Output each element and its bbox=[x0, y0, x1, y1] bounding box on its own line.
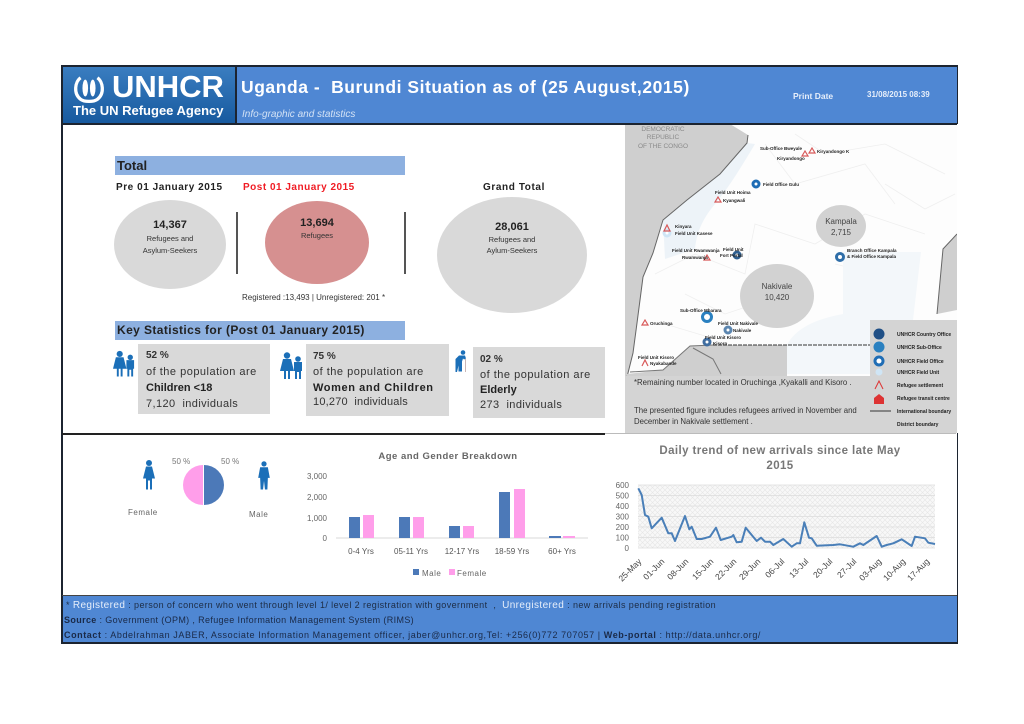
line chart date labels: 13-Jul bbox=[787, 556, 810, 580]
map: place labels: Field Office Gulu bbox=[763, 182, 799, 187]
line chart date labels: 27-Jul bbox=[835, 556, 858, 580]
divider left bbox=[236, 212, 238, 274]
male label: Male bbox=[249, 510, 268, 519]
line chart date labels: 08-Jun bbox=[665, 556, 691, 582]
bar chart title: Age and Gender Breakdown bbox=[378, 451, 518, 462]
map: place labels bbox=[638, 146, 897, 366]
header title: Uganda - Burundi Situation as of (25 August,2015) bbox=[241, 77, 690, 97]
line chart plot area bbox=[638, 485, 935, 548]
icon: male bbox=[258, 461, 270, 490]
map note: included figure: December in Nakivale settlement . bbox=[634, 416, 753, 426]
map note: remaining number: *Remaining number located in Oruchinga ,Kyakalli and Kisoro . bbox=[634, 378, 852, 387]
map: place labels: Kyangwali bbox=[723, 198, 745, 203]
gender labels bbox=[172, 457, 239, 466]
header subtitle: Info-graphic and statistics bbox=[242, 109, 355, 120]
line chart date labels bbox=[616, 556, 932, 583]
line chart title: 2015 bbox=[766, 460, 794, 472]
bar chart y axis: 1,000 bbox=[307, 514, 328, 523]
line chart y axis bbox=[616, 481, 630, 553]
logo panel bbox=[63, 67, 235, 123]
map: Kampala label: 2,715 bbox=[831, 228, 852, 237]
stat card: women and children: 10,270 individuals bbox=[313, 396, 408, 408]
total heading bar bbox=[115, 156, 405, 175]
stat card: women and children bbox=[306, 344, 449, 416]
line chart: daily trend bbox=[616, 445, 936, 583]
stat card: children: 7,120 individuals bbox=[146, 398, 238, 410]
grand total heading: Grand Total bbox=[483, 182, 545, 193]
total heading bar: Total bbox=[117, 158, 147, 173]
map: place labels: Field Unit bbox=[723, 247, 744, 252]
header band bbox=[62, 66, 957, 124]
map: DRC territory bbox=[625, 124, 748, 377]
footer source line: Source : Government (OPM) , Refugee Information Management System (RIMS) bbox=[64, 615, 414, 625]
icon: women and children 2 bbox=[280, 352, 302, 379]
grand total bubble: 28,061 bbox=[495, 221, 529, 233]
line chart date labels: 10-Aug bbox=[881, 556, 908, 583]
map: lake victoria bbox=[787, 252, 921, 374]
line chart date labels: 01-Jun bbox=[641, 556, 667, 582]
stat card: elderly: 273 individuals bbox=[480, 399, 562, 411]
bar chart x axis: 05-11 Yrs bbox=[394, 547, 428, 556]
map: Nakivale label bbox=[762, 282, 793, 302]
post 2015 bubble: Refugees bbox=[301, 231, 333, 240]
icon: women and children 1 bbox=[113, 350, 134, 376]
map: Nakivale label: 10,420 bbox=[765, 293, 790, 302]
map: southern boundary bbox=[630, 345, 721, 374]
line chart date labels: 03-Aug bbox=[857, 556, 884, 583]
map: legend: UNHCR Field Unit bbox=[897, 370, 940, 376]
map: legend: International boundary bbox=[897, 409, 951, 415]
map: legend: UNHCR Field Office bbox=[897, 359, 944, 365]
post 2015 bubble bbox=[265, 201, 369, 284]
bar chart female bars bbox=[363, 489, 575, 538]
map: place labels: Field Unit Kasese bbox=[675, 231, 713, 236]
bar chart legend: Male bbox=[422, 569, 441, 578]
map: place labels: Rwamwanja bbox=[682, 255, 708, 260]
frame lines bbox=[61, 65, 958, 644]
stat card: children bbox=[138, 344, 270, 414]
icon: elderly bbox=[456, 350, 466, 372]
line chart date labels: 29-Jun bbox=[737, 556, 763, 582]
line chart date labels: 15-Jun bbox=[690, 556, 716, 582]
map: place labels: Field Unit Hoima bbox=[715, 190, 751, 195]
grand total bubble: Refugees and bbox=[489, 235, 535, 244]
line chart date labels: 20-Jul bbox=[811, 556, 834, 580]
line chart y axis: 200 bbox=[616, 523, 630, 532]
map: place labels: Kiryandongo K bbox=[817, 149, 850, 154]
bar chart y axis bbox=[307, 472, 328, 543]
map: place labels: Nyakabande bbox=[650, 361, 677, 366]
stat card: elderly: 02 % bbox=[480, 354, 503, 365]
bar chart legend bbox=[413, 569, 487, 578]
map: Kampala label bbox=[825, 217, 857, 237]
map: east territory bbox=[937, 234, 957, 314]
map: place labels: Oruchinga bbox=[650, 321, 673, 326]
map: lake albert tint bbox=[663, 143, 755, 259]
map: legend: UNHCR Country Office bbox=[897, 332, 951, 338]
map: DRC label: REPUBLIC bbox=[647, 134, 680, 141]
line chart title bbox=[659, 445, 901, 472]
post 2015 heading: Post 01 January 2015 bbox=[243, 182, 355, 193]
footer definition line: * Registered : person of concern who went through level 1/ level 2 registration with government , Unregistered : new arrivals pending registration bbox=[66, 600, 716, 611]
bar chart x axis: 0-4 Yrs bbox=[348, 547, 374, 556]
stat card: elderly bbox=[473, 347, 605, 418]
stat card: children: 52 % bbox=[146, 350, 169, 361]
pre 2015 bubble: 14,367 bbox=[153, 219, 187, 231]
stat card: elderly: Elderly bbox=[480, 384, 517, 396]
bar chart male bars bbox=[349, 492, 561, 538]
map: settlement markers bbox=[642, 148, 815, 366]
divider right bbox=[404, 212, 406, 274]
map note: included figure: The presented figure includes refugees arrived in November and bbox=[634, 406, 857, 415]
stat card: women and children: Women and Children bbox=[313, 382, 434, 394]
logo wordmark: UNHCR bbox=[112, 69, 224, 104]
map: place labels: Branch Office Kampala bbox=[847, 248, 897, 253]
post 2015 bubble: 13,694 bbox=[300, 217, 334, 229]
female label: Female bbox=[128, 508, 158, 517]
map: legend: District boundary bbox=[897, 422, 939, 428]
pie: gender split bbox=[183, 465, 224, 505]
map: eastern boundary bbox=[937, 234, 957, 314]
stat card: women and children: 75 % bbox=[313, 351, 336, 362]
line chart date labels: 06-Jul bbox=[763, 556, 786, 580]
pre 2015 heading: Pre 01 January 2015 bbox=[116, 182, 223, 193]
registered note: Registered :13,493 | Unregistered: 201 * bbox=[242, 293, 385, 302]
map: place labels: & Field Office Kampala bbox=[847, 254, 897, 259]
map: place labels: Field Unit Nakivale bbox=[718, 321, 759, 326]
bar chart x axis bbox=[348, 547, 576, 556]
map: Kampala label: Kampala bbox=[825, 217, 857, 226]
line chart y axis: 300 bbox=[616, 512, 630, 522]
map: place labels: Kisoro bbox=[713, 341, 728, 346]
pre 2015 bubble: Refugees and bbox=[147, 234, 193, 243]
gender labels: 50 % bbox=[221, 457, 239, 466]
bar chart y axis: 3,000 bbox=[307, 472, 328, 481]
map bbox=[625, 125, 957, 433]
bar chart: age and gender bbox=[307, 451, 588, 578]
map: place labels: Kiryandongo bbox=[777, 156, 805, 161]
line chart date labels: 25-May bbox=[616, 556, 644, 583]
print date value: 31/08/2015 08:39 bbox=[867, 90, 930, 99]
map: legend: UNHCR Sub-Office bbox=[897, 345, 942, 351]
map: Kampala bubble bbox=[816, 205, 866, 247]
map: place labels: Sub-Office Bweyale bbox=[760, 146, 803, 151]
map: place labels: Kinyara bbox=[675, 224, 692, 229]
stat card: women and children: of the population are bbox=[313, 366, 424, 378]
map: note panel bbox=[625, 320, 957, 433]
map: place labels: Field Unit Kisoro bbox=[638, 355, 674, 360]
footer band bbox=[62, 596, 957, 643]
map: DRC label: OF THE CONGO bbox=[638, 143, 688, 150]
line chart y axis: 100 bbox=[616, 534, 630, 542]
line chart series bbox=[638, 488, 935, 547]
line chart y axis: 0 bbox=[625, 544, 630, 553]
map: legend: Refugee transit centre bbox=[897, 396, 950, 402]
map: place labels: Fort Portal bbox=[720, 253, 743, 258]
map: boundary with DRC bbox=[627, 135, 748, 377]
logo tagline: The UN Refugee Agency bbox=[73, 103, 224, 118]
map: legend bbox=[870, 328, 951, 428]
bar chart y axis: 2,000 bbox=[307, 493, 328, 502]
footer contact line: Contact : Abdelrahman JABER, Associate Information Management officer, jaber@unhcr.org,Tel: +256(0)772 707057 | Web-portal : http://data.unhcr.org/ bbox=[64, 630, 761, 640]
print date label: Print Date bbox=[793, 91, 833, 101]
map: place labels: Sub-Office Mbarara bbox=[680, 308, 722, 313]
bar chart x axis: 18-59 Yrs bbox=[495, 547, 529, 556]
bar chart x axis: 12-17 Yrs bbox=[445, 547, 479, 556]
key statistics heading: Key Statistics for (Post 01 January 2015) bbox=[117, 323, 365, 337]
grand total bubble bbox=[437, 197, 587, 313]
map: office markers bbox=[664, 181, 844, 345]
line chart y axis: 400 bbox=[616, 502, 630, 511]
panel: total section bbox=[114, 156, 587, 313]
pre 2015 bubble: Asylum-Seekers bbox=[143, 246, 197, 255]
bar chart legend: Female bbox=[457, 569, 487, 578]
map: place labels: Field Unit Rwamwanja bbox=[672, 248, 720, 253]
icon: female bbox=[143, 460, 155, 490]
bar chart y axis: 0 bbox=[323, 534, 328, 543]
stat card: children: of the population are bbox=[146, 366, 257, 378]
line chart date labels: 17-Aug bbox=[905, 556, 932, 583]
map: Rwanda and Tanzania territory bbox=[627, 345, 787, 376]
line chart title: Daily trend of new arrivals since late May bbox=[659, 445, 901, 457]
bar chart x axis: 60+ Yrs bbox=[548, 547, 576, 556]
map note: included figure bbox=[634, 406, 857, 426]
map: DRC label: DEMOCRATIC bbox=[641, 126, 685, 133]
grand total bubble: Aylum-Seekers bbox=[487, 246, 537, 255]
map: legend: Refugee settlement bbox=[897, 383, 943, 389]
pre 2015 bubble bbox=[114, 200, 226, 289]
line chart y axis: 500 bbox=[616, 492, 630, 500]
line chart y axis: 600 bbox=[616, 481, 630, 490]
map: DRC label bbox=[638, 126, 688, 150]
map: Nakivale bubble bbox=[740, 264, 814, 328]
map: international boundary bbox=[713, 344, 870, 346]
stat card: children: Children <18 bbox=[146, 382, 212, 394]
gender labels: 50 % bbox=[172, 457, 190, 466]
line chart date labels: 22-Jun bbox=[713, 556, 739, 582]
key statistics heading bbox=[115, 321, 405, 340]
map: faint districts bbox=[655, 134, 955, 339]
map: Nakivale label: Nakivale bbox=[762, 282, 793, 291]
map: place labels: Field Unit Kisoro bbox=[705, 335, 741, 340]
logo emblem bbox=[74, 76, 104, 103]
stat card: elderly: of the population are bbox=[480, 369, 591, 381]
map: place labels: Nakivale bbox=[733, 328, 752, 333]
